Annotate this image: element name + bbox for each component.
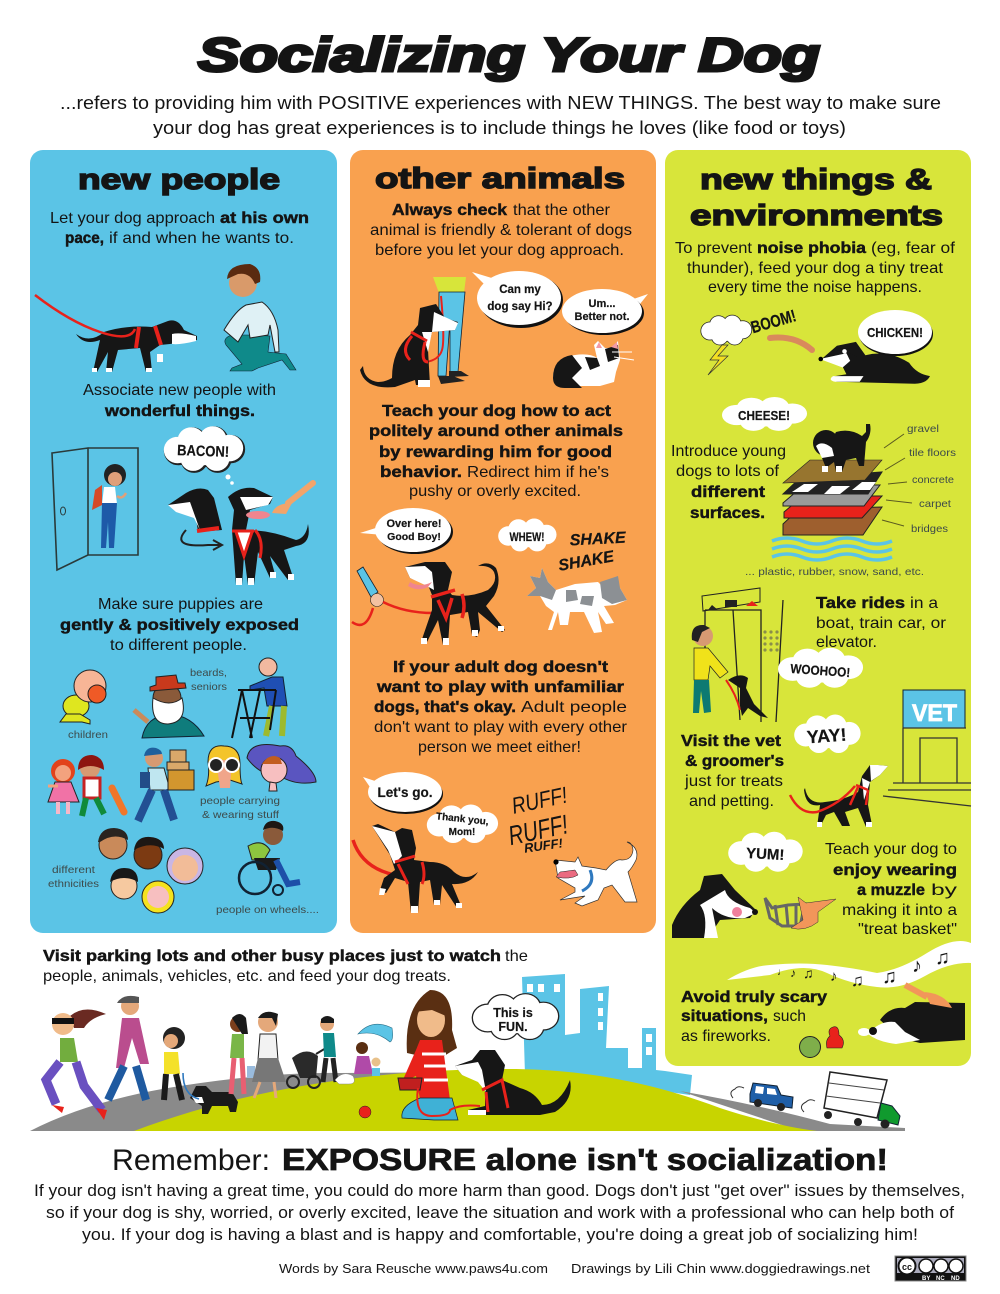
icon: creative commons badge: cc <box>902 1262 912 1272</box>
closing paragraph: If your dog isn't having a great time, you could do more harm than good. Dogs don't just "get over" issues by themselves, <box>34 1182 965 1200</box>
text: adult dog does not want to play: person we meet either! <box>418 739 581 756</box>
speech bubble: YUM <box>728 832 803 872</box>
illustration: kids playing <box>48 755 124 816</box>
mother and child with umbrella <box>354 1024 393 1076</box>
text: avoid scary situations <box>681 989 827 1045</box>
title: Socializing Your Dog <box>198 28 820 81</box>
text: noise phobia <box>675 240 956 296</box>
label: children: children <box>68 729 108 741</box>
text: approach at own pace: at his own <box>220 210 309 227</box>
vehicles <box>731 1072 900 1128</box>
women walking <box>230 1012 286 1098</box>
text: take rides: Take rides <box>816 595 905 612</box>
illustration: hand and leash <box>352 567 433 625</box>
label: different ethnicities: different <box>52 864 95 876</box>
text: take rides <box>816 595 947 651</box>
text: associate with wonderful things <box>83 382 276 420</box>
speech bubble: Over here! Good Boy!: Over here! <box>386 518 442 530</box>
illustration: ball and toy <box>800 1027 843 1058</box>
text: approach at own pace: pace, <box>65 230 104 247</box>
credits: Drawings by Lili Chin www.doggiedrawings.net <box>571 1262 871 1276</box>
lettering: BOOM: BOOM! <box>749 306 798 337</box>
text: always check: before you let your dog approach. <box>375 242 624 259</box>
jogger <box>46 1009 107 1120</box>
icon: creative commons badge <box>895 1256 966 1282</box>
illustration: leashed dog looking up <box>353 824 478 913</box>
text: visit parking lots <box>43 948 528 985</box>
label: different ethnicities: ethnicities <box>48 878 99 890</box>
speech bubble: Thank you, Mom: Mom! <box>449 827 475 838</box>
speech bubble: Over here! Good Boy! <box>360 508 453 554</box>
lettering: RUFF RUFF RUFF <box>506 782 571 856</box>
red ball and leash <box>359 1088 480 1118</box>
text: adult dog does not want to play: don't want to play with every other <box>374 719 628 736</box>
speech bubble: Let's go <box>363 772 443 814</box>
text: adult dog does not want to play <box>374 659 628 756</box>
closing paragraph <box>34 1182 965 1244</box>
label: people carrying and wearing stuff: & wearing stuff <box>202 809 279 821</box>
credits <box>279 1262 871 1276</box>
illustration: vet dog with leash <box>790 765 888 827</box>
heading: new people: new people <box>78 164 280 196</box>
speech bubble: This is FUN: FUN. <box>498 1020 528 1034</box>
illustration: dog head looking away <box>168 489 222 532</box>
text: take rides: elevator. <box>816 634 877 651</box>
labels: surface types: concrete <box>912 474 954 486</box>
text: noise phobia: (eg, fear of <box>871 240 956 257</box>
text: teach politely: Teach your dog how to act <box>382 403 612 420</box>
text: visit parking lots: the <box>505 948 528 965</box>
labels: surface types: carpet <box>919 498 951 510</box>
illustration: music stripe with notes: ♪ <box>912 955 922 977</box>
illustration: music stripe with notes: ♩ <box>777 967 787 978</box>
credits: Words by Sara Reusche www.paws4u.com <box>279 1262 548 1276</box>
speech bubble: WHEW <box>498 518 557 551</box>
speech bubble: YAY: YAY! <box>806 725 847 747</box>
text: muzzle training <box>825 841 957 938</box>
labels: surface types: tile floors <box>909 447 956 459</box>
intro text <box>60 92 941 138</box>
icon: creative commons badge: ND <box>951 1276 960 1282</box>
text: teach politely: pushy or overly excited. <box>409 483 581 500</box>
illustration: running dog <box>405 562 505 645</box>
illustration: cat <box>553 341 634 388</box>
illustration: dog looking at hand <box>228 483 313 585</box>
stroller and parent <box>287 1016 354 1088</box>
text: visit parking lots: Visit parking lots and other busy places just to watch <box>43 948 501 965</box>
man with cap <box>108 996 149 1100</box>
illustration: woman with sunglasses <box>206 746 242 788</box>
lettering: RUFF RUFF RUFF: RUFF! <box>506 809 571 851</box>
heading: Remember exposure: EXPOSURE alone isn't socialization! <box>282 1142 888 1177</box>
text: always check: Always check <box>392 202 507 219</box>
lettering: SHAKE SHAKE <box>557 529 627 575</box>
illustration: woman with dog at elevator <box>692 588 783 722</box>
text: avoid scary situations: as fireworks. <box>681 1028 771 1045</box>
illustration: thunder cloud <box>701 316 751 375</box>
text: adult dog does not want to play: If your adult dog doesn't <box>393 659 609 676</box>
speech bubble: CHICKEN <box>858 310 933 356</box>
heading: Remember exposure: Remember: <box>112 1144 270 1177</box>
text: noise phobia: To prevent <box>675 240 753 257</box>
speech bubble: CHEESE: CHEESE! <box>738 408 790 423</box>
speech bubble: Thank you, Mom <box>427 804 498 843</box>
illustration: music stripe with notes <box>727 941 971 990</box>
heading: new things & environments: environments <box>690 200 943 232</box>
illustration: kneeling man <box>224 264 296 371</box>
speech bubble: Um... Better not: Better not. <box>574 311 630 323</box>
text: noise phobia: thunder), feed your dog a tiny treat <box>687 260 944 277</box>
text: different surfaces: Introduce young <box>671 443 786 460</box>
illustration: water waves <box>772 538 892 560</box>
speech bubble: Thank you, Mom: Thank you, <box>435 811 489 828</box>
text: visit the vet: and petting. <box>689 793 774 810</box>
panel: other animals <box>350 150 656 933</box>
speech bubble: Can my dog say Hi? <box>472 271 563 328</box>
text: muzzle training: by <box>931 882 957 899</box>
road and hill <box>30 1072 500 1131</box>
text: muzzle training: a muzzle <box>857 882 925 899</box>
speech bubble: CHICKEN: CHICKEN! <box>867 325 923 340</box>
illustration: owner legs <box>426 277 469 384</box>
text: always check: animal is friendly & tolerant of dogs <box>370 222 632 239</box>
text: visit the vet: Visit the vet <box>681 733 782 750</box>
closing paragraph: you. If your dog is having a blast and is happy and comfortable, you're doing a great job of socializing him! <box>82 1226 918 1244</box>
label: beards, seniors: seniors <box>191 681 227 693</box>
closing paragraph: so if your dog is shy, worried, or overly excited, leave the situation and work with a professional who can help both of <box>46 1204 954 1222</box>
speech bubble: Can my dog say Hi?: dog say Hi? <box>487 301 553 313</box>
illustration: barking white dog <box>553 842 637 906</box>
text: teach politely: by rewarding him for good <box>379 444 612 461</box>
text: gently and positively exposed: Make sure puppies are <box>98 596 263 613</box>
illustration: person in wheelchair <box>239 821 300 895</box>
intro text: ...refers to providing him with POSITIVE experiences with NEW THINGS. The best way to make sure <box>60 92 941 113</box>
text: associate with wonderful things: wonderful things. <box>104 403 255 420</box>
illustration: hand treating lying dog <box>770 338 930 384</box>
text: muzzle training: enjoy wearing <box>833 862 957 879</box>
icon: curved arrow <box>181 530 222 550</box>
label: plastic, rubber, snow, sand: ... plastic, rubber, snow, sand, etc. <box>745 566 924 578</box>
speech bubble: WHEW: WHEW! <box>510 532 544 544</box>
labels: surface types: gravel <box>907 423 939 435</box>
icon: creative commons badge: NC <box>936 1276 945 1282</box>
text: muzzle training: "treat basket" <box>858 921 957 938</box>
speech bubble: YUM: YUM! <box>746 845 785 864</box>
illustration: music stripe with notes: ♫ <box>882 966 897 988</box>
text: noise phobia: noise phobia <box>757 240 866 257</box>
text: noise phobia: every time the noise happens. <box>708 279 922 296</box>
speech bubble: This is FUN: This is <box>493 1006 533 1020</box>
text: approach at own pace: Let your dog approach <box>50 210 215 227</box>
text: avoid scary situations: such <box>773 1008 806 1025</box>
boston terrier <box>183 1073 238 1114</box>
illustration: dog with muzzle and hand <box>672 874 836 938</box>
speech bubble: WOOHOO: WOOHOO! <box>790 661 851 680</box>
illustration: music stripe with notes: ♫ <box>935 947 950 969</box>
illustration: dog approaching on leash <box>35 295 197 372</box>
text: take rides: in a <box>910 595 938 612</box>
heading: new things & environments <box>690 164 943 232</box>
speech bubble: Over here! Good Boy!: Good Boy! <box>387 531 441 543</box>
speech bubble: Um... Better not <box>562 289 648 335</box>
illustration: woman with hat <box>247 744 316 791</box>
icon: creative commons badge: BY <box>922 1276 930 1282</box>
illustration: bearded man <box>134 675 204 738</box>
illustration: sitting dog <box>360 304 458 387</box>
illustration: faces of different ethnicities <box>98 828 203 913</box>
woman sitting with treat pouch <box>398 990 458 1120</box>
speech bubble: CHEESE <box>722 397 807 431</box>
text: teach politely <box>369 403 623 500</box>
speech bubble: YAY <box>794 714 861 753</box>
text: visit the vet <box>681 733 784 810</box>
text: different surfaces: surfaces. <box>690 505 765 522</box>
illustration: shaking dog <box>527 568 627 633</box>
illustration: delivery man with boxes <box>138 748 194 821</box>
labels: surface types: bridges <box>911 523 948 535</box>
text: approach at own pace <box>50 210 309 247</box>
text: adult dog does not want to play: Adult people <box>521 699 627 716</box>
text: different surfaces: different <box>691 484 766 501</box>
label: beards, seniors: beards, <box>190 667 227 679</box>
speech bubble: BACON <box>164 426 244 485</box>
woman in yellow <box>163 1027 185 1100</box>
text: adult dog does not want to play: dogs, that's okay. <box>374 699 516 716</box>
heading: Remember exposure <box>112 1142 888 1177</box>
speech bubble: WOOHOO <box>778 648 863 688</box>
illustration: city and hill scene <box>30 974 905 1131</box>
text: always check <box>370 202 632 259</box>
illustration: music stripe with notes: ♫ <box>803 965 814 981</box>
heading: new things & environments: new things & <box>700 164 932 196</box>
speech bubble: Let's go: Let's go. <box>378 785 432 800</box>
speech bubble: BACON: BACON! <box>177 442 229 461</box>
text: gently and positively exposed: gently & positively exposed <box>60 617 299 634</box>
illustration: scared dog being comforted <box>858 985 965 1044</box>
text: visit the vet: just for treats <box>684 773 783 790</box>
text: muzzle training: Teach your dog to <box>825 841 957 858</box>
lettering: SHAKE SHAKE: SHAKE <box>557 548 617 575</box>
panel: new things and environments <box>665 150 971 1066</box>
speech bubble: Um... Better not: Um... <box>589 298 615 310</box>
illustration: door with woman <box>52 448 138 570</box>
text: different surfaces <box>671 443 786 522</box>
text: gently and positively exposed <box>60 596 299 654</box>
text: approach at own pace: if and when he wants to. <box>109 230 294 247</box>
illustration: music stripe with notes: ♪ <box>790 966 796 980</box>
text: avoid scary situations: situations, <box>681 1008 768 1025</box>
text: avoid scary situations: Avoid truly scary <box>681 989 827 1006</box>
text: adult dog does not want to play: want to play with unfamiliar <box>376 679 624 696</box>
lettering: RUFF RUFF RUFF: RUFF! <box>509 782 570 819</box>
text: gently and positively exposed: to different people. <box>110 637 247 654</box>
heading: other animals: other animals <box>375 163 625 195</box>
text: teach politely: Redirect him if he's <box>467 464 609 481</box>
label: different ethnicities <box>48 864 99 890</box>
illustration: stack of surfaces with puppy <box>783 424 882 535</box>
label: people carrying and wearing stuff <box>200 795 280 821</box>
illustration: music stripe with notes: ♪ <box>830 968 838 985</box>
illustration: music stripe with notes: ♫ <box>851 971 864 990</box>
text: different surfaces: dogs to lots of <box>676 463 780 480</box>
speech bubble: This is FUN <box>473 994 558 1039</box>
illustration: baby <box>60 670 106 724</box>
text: take rides: boat, train car, or <box>816 615 947 632</box>
label: beards, seniors <box>190 667 227 693</box>
text: teach politely: politely around other animals <box>369 423 623 440</box>
text: visit parking lots: people, animals, vehicles, etc. and feed your dog treats. <box>43 968 451 985</box>
text: always check: that the other <box>513 202 611 219</box>
speech bubble: Can my dog say Hi?: Can my <box>499 284 541 296</box>
lettering: SHAKE SHAKE: SHAKE <box>569 529 627 549</box>
illustration: vet building: VET <box>912 700 957 727</box>
text: visit the vet: & groomer's <box>685 753 784 770</box>
label: people on wheels: people on wheels.... <box>216 904 319 916</box>
panel: new people <box>30 150 337 933</box>
label: people carrying and wearing stuff: people carrying <box>200 795 280 807</box>
text: associate with wonderful things: Associate new people with <box>83 382 276 399</box>
text: muzzle training: making it into a <box>842 902 957 919</box>
illustration: vet building <box>883 690 971 806</box>
city skyline <box>522 974 692 1095</box>
illustration: senior with walker <box>232 658 287 738</box>
lettering: RUFF RUFF RUFF: RUFF! <box>523 835 564 856</box>
intro text: your dog has great experiences is to include things he loves (like food or toys) <box>153 117 846 138</box>
text: teach politely: behavior. <box>380 464 462 481</box>
dog lying on the hill <box>455 1050 571 1115</box>
labels: surface types <box>882 423 956 535</box>
